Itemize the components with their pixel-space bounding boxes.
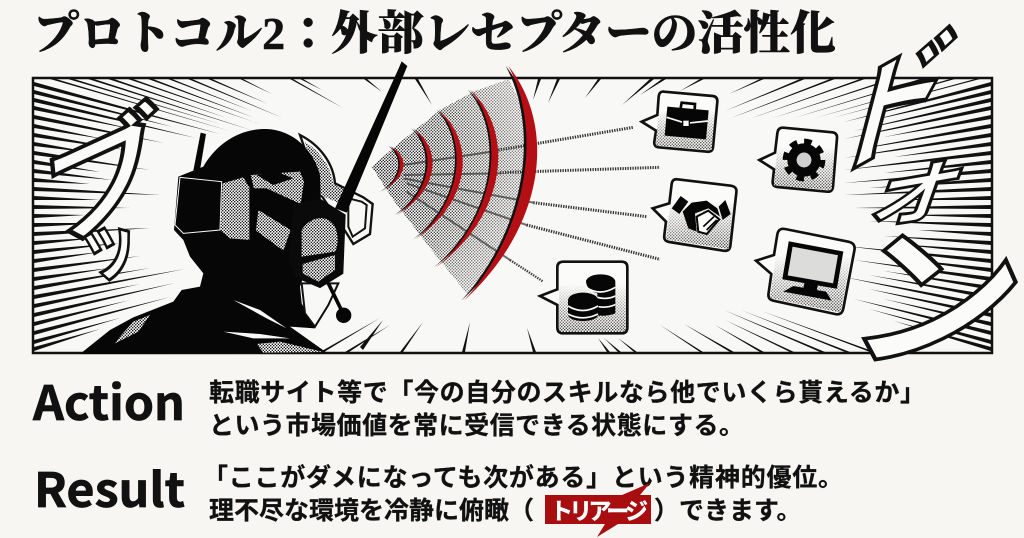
- goggle box: [175, 177, 222, 233]
- eye shadow: [257, 172, 293, 185]
- antenna: [335, 61, 407, 213]
- coin stack front rims: [568, 306, 598, 318]
- focus lines: [34, 79, 991, 352]
- arc 5: [461, 66, 535, 301]
- earcup dome: [302, 218, 338, 257]
- briefcase handle: [681, 103, 695, 109]
- collar line: [233, 300, 287, 328]
- earcup lower band: [303, 255, 335, 282]
- left hand: [683, 201, 720, 232]
- result text line 2 start: 理不尽な環境を冷静に俯瞰（: [209, 491, 534, 527]
- earcup shell: [289, 199, 345, 287]
- tag shape: [545, 483, 651, 537]
- collar line 2: [223, 332, 290, 338]
- monitor stand: [803, 280, 818, 291]
- gear hub: [797, 153, 811, 167]
- chin: [302, 283, 338, 327]
- result text line 1: 「ここがダメになっても次がある」という精神的優位。: [203, 458, 843, 494]
- finger lines: [703, 217, 717, 230]
- triage tag: [545, 483, 651, 537]
- visor end: [348, 198, 367, 237]
- sound effect: ブッ: [34, 60, 171, 297]
- halftone fan: [372, 79, 528, 293]
- coins bubble: [540, 262, 627, 333]
- microphone tip: [336, 308, 351, 323]
- monitor screen: [785, 244, 841, 286]
- microphone boom: [328, 283, 343, 314]
- earcup: [289, 199, 345, 287]
- coin stack back rims: [586, 287, 615, 307]
- goggle halftone: [220, 177, 249, 240]
- icon: gear: [759, 128, 837, 192]
- letter ブ: ブ: [34, 60, 171, 281]
- panel: manga scene: [32, 24, 1018, 362]
- strap halftone: [256, 210, 291, 251]
- arc 1: [380, 146, 402, 192]
- left cuff: [672, 196, 688, 214]
- sound effect: ドォン: [812, 0, 1024, 401]
- handshake shade: [666, 204, 733, 249]
- signal waves: [372, 66, 660, 333]
- brow halftone: [251, 172, 304, 204]
- result text line 2 end: ）できます。: [654, 491, 802, 527]
- gear teeth: [786, 142, 822, 178]
- coin stack front: [568, 293, 598, 321]
- monitor shade: [770, 258, 850, 312]
- result label: Result: [34, 452, 185, 521]
- tag text: トリアージ: [550, 492, 648, 526]
- action label: Action: [32, 365, 185, 434]
- wave arcs: [380, 66, 537, 301]
- gear ring: [792, 148, 816, 172]
- briefcase shade: [656, 112, 714, 150]
- title: プロトコル2：外部レセプターの活性化: [33, 8, 836, 59]
- right cuff: [719, 200, 731, 220]
- letter ォ: ォ: [846, 108, 997, 250]
- small antenna: [193, 133, 206, 174]
- arc 3: [413, 110, 461, 239]
- arc 2: [395, 128, 431, 215]
- panel frame: [33, 78, 992, 353]
- arc 4 red: [436, 89, 498, 267]
- block: result: [34, 452, 843, 537]
- figure: soldier with headset: [80, 61, 407, 354]
- silhouette: head and shoulders: [80, 129, 327, 354]
- right fingers: [697, 211, 719, 234]
- icon: monitor: [756, 229, 855, 314]
- letter ッ: ッ: [63, 184, 151, 297]
- briefcase bubble: [642, 92, 717, 152]
- helmet rear shell: [300, 135, 373, 244]
- gear shade: [774, 150, 834, 190]
- block: action: [32, 365, 925, 442]
- signal lines to icons: [403, 127, 660, 282]
- briefcase body: [665, 107, 709, 139]
- icon: handshake: [653, 179, 736, 251]
- action text: 転職サイト等で「今の自分のスキルなら他でいくら貰えるか」: [209, 373, 925, 409]
- collar halftone: [257, 342, 323, 353]
- icon: briefcase: [642, 92, 717, 152]
- arc 2 red: [397, 128, 433, 215]
- coin stack back: [586, 274, 615, 316]
- icon: coins: [540, 262, 627, 333]
- arc 3 red: [415, 110, 463, 239]
- shoulder halftone: [115, 315, 150, 343]
- gear bubble: [759, 128, 837, 192]
- fan fade: [372, 79, 528, 293]
- arc 5 red: [464, 66, 537, 301]
- coins bubble shade: [558, 286, 626, 332]
- briefcase clasp: [683, 120, 689, 127]
- action text: という市場価値を常に受信できる状態にする。: [209, 406, 744, 442]
- monitor base: [783, 286, 832, 301]
- helmet halftone: [305, 142, 353, 207]
- handshake bubble: [653, 179, 736, 251]
- briefcase flap line: [667, 117, 708, 123]
- monitor bubble: [756, 229, 855, 314]
- icons group: [642, 92, 855, 314]
- arc 4: [434, 89, 496, 267]
- arc 1 red: [382, 146, 404, 192]
